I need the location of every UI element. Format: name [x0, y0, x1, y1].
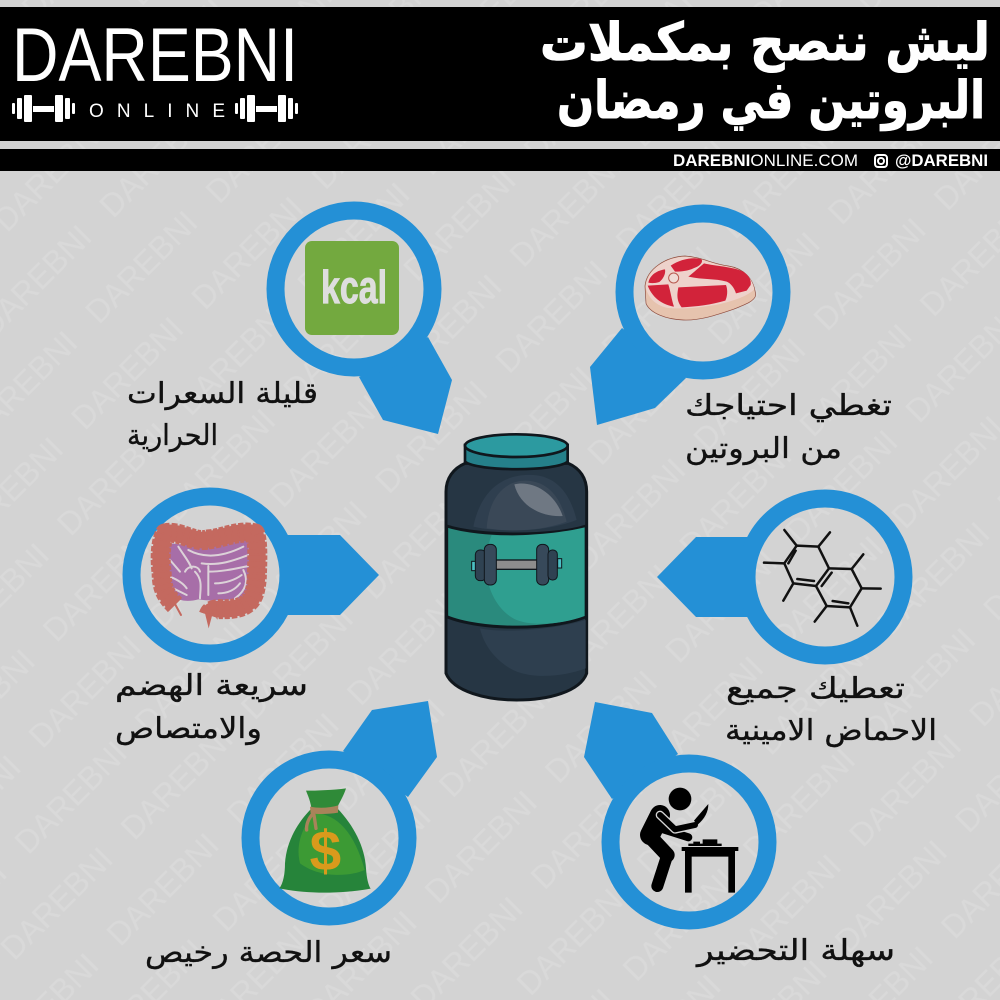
label [725, 671, 937, 747]
pointer [285, 535, 379, 615]
label: تعطيك جميع [726, 671, 905, 705]
icon: right dumbbell [235, 95, 298, 122]
label: من البروتين [685, 431, 842, 465]
pointer [359, 337, 452, 434]
icon: money bag [279, 788, 371, 893]
label: سريعة الهضم [115, 668, 308, 703]
upper highlight [473, 475, 577, 531]
label [685, 388, 892, 465]
ring [624, 214, 782, 370]
pointer [590, 328, 686, 425]
pointer [584, 702, 678, 799]
pointer [343, 701, 437, 797]
glare [514, 484, 563, 516]
icon: person cooking [650, 788, 738, 893]
ring [250, 760, 408, 916]
icon: kcal: kcal [321, 261, 387, 313]
handle: @DAREBNI [895, 151, 988, 170]
panel: cheap price [145, 701, 437, 969]
ring [610, 764, 768, 920]
label: الاحماض الامينية [725, 713, 937, 747]
label: سهلة التحضير [695, 933, 895, 967]
logo wordmark: DAREBNI [12, 13, 298, 98]
icon: protein jar [446, 434, 587, 700]
label: تغطي احتياجك [685, 388, 892, 423]
contact bar [0, 149, 1000, 171]
label: قليلة السعرات [127, 376, 318, 410]
logo online text: ONLINE [89, 101, 225, 122]
panel: digestion [115, 496, 379, 745]
label [115, 668, 308, 745]
icon: intestines [161, 533, 257, 628]
lid [465, 445, 568, 469]
label: سعر الحصة رخيص [145, 935, 392, 969]
icon: meat [645, 256, 756, 320]
panel: low calories [127, 210, 452, 452]
panel: amino acids [657, 498, 937, 747]
label [127, 376, 318, 452]
icon: kcal [305, 241, 399, 335]
label band [447, 526, 586, 627]
icon: molecule [764, 530, 881, 626]
panel: easy preparation [584, 702, 895, 967]
ring [132, 496, 288, 654]
small intestine [168, 538, 251, 601]
icon: money bag: $ [310, 821, 341, 884]
pointer [657, 537, 750, 617]
panel: protein needs [590, 214, 892, 465]
website: DAREBNIONLINE.COM [673, 151, 858, 170]
dumbbell [472, 544, 562, 585]
header banner [0, 7, 1000, 141]
label: والامتصاص [115, 711, 262, 745]
ring [746, 498, 904, 656]
large intestine [161, 533, 257, 615]
jar body [446, 463, 587, 700]
lower highlight [480, 620, 586, 676]
icon: instagram [875, 155, 887, 167]
label: الحرارية [127, 418, 218, 452]
ring [276, 210, 432, 368]
icon: left dumbbell [12, 95, 75, 122]
